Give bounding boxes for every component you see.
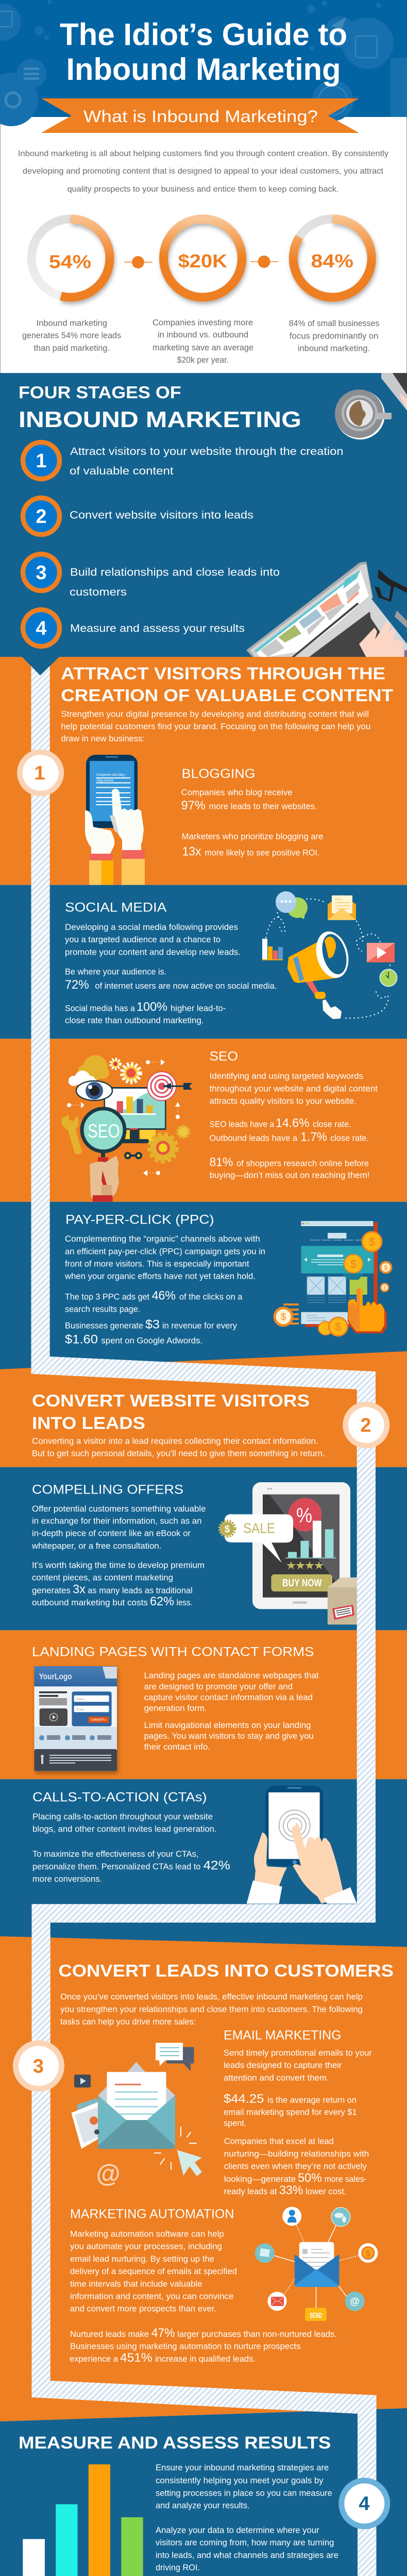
ppc text: an efficient pay-per-click (PPC) campaign gets you in	[65, 1246, 265, 1256]
stage 3	[23, 554, 280, 598]
stage 1: 1	[36, 450, 47, 472]
seo text: Identifying and using targeted keywords	[209, 1071, 363, 1081]
icon: automation network	[255, 2207, 378, 2321]
donut: 54%: 54%	[49, 251, 91, 272]
heading	[19, 383, 301, 432]
icon: ppc webpage and coins: $	[384, 1264, 388, 1272]
panel: landing pages	[0, 1630, 407, 1779]
caption: $20k: in inbound vs. outbound	[158, 330, 248, 340]
email marketing text: clients even when they’re not actively	[224, 2161, 367, 2171]
stage 2	[23, 498, 253, 535]
marketing automation text: 47%	[151, 2326, 175, 2340]
offers text: in exchange for their information, such as an	[32, 1516, 201, 1526]
heading: INTO LEADS	[32, 1413, 145, 1432]
notch arrow	[22, 657, 59, 675]
badge 4	[342, 2481, 387, 2527]
cta text: more conversions.	[32, 1874, 102, 1884]
offers text: It’s worth taking the time to develop premium	[32, 1560, 205, 1570]
ppc text: when your organic efforts have not yet taken hold.	[64, 1271, 256, 1281]
marketing automation text: and convert more prospects than ever.	[70, 2304, 216, 2314]
marketing automation text	[70, 2207, 337, 2365]
stage 1: of valuable content	[70, 465, 174, 477]
badge 1: 1	[34, 762, 45, 784]
seo text: close rate.	[313, 1120, 351, 1129]
badge 2: 2	[360, 1415, 371, 1436]
ppc text: The top 3 PPC ads get	[65, 1292, 149, 1301]
heading	[61, 664, 393, 705]
icon: landing page mockup: Email	[76, 1708, 84, 1711]
icon: sale tablet	[220, 1482, 357, 1624]
stage 4: Measure and assess your results	[70, 623, 245, 635]
cta text: To maximize the effectiveness of your CTAs,	[32, 1849, 198, 1859]
ribbon heading: What is Inbound Marketing?	[83, 107, 318, 126]
cta text	[32, 1790, 230, 1884]
donut: 54%	[31, 219, 110, 297]
offers text: in-depth piece of content like an eBook or	[32, 1529, 191, 1538]
social media text	[65, 900, 277, 1025]
social media text: promote your content and develop new leads.	[65, 947, 241, 957]
ppc text: PAY-PER-CLICK (PPC)	[65, 1213, 214, 1227]
icon: laptop	[246, 562, 407, 663]
social media text: Developing a social media following provides	[65, 922, 238, 932]
caption: 84%	[289, 319, 379, 353]
social media text: 100%	[137, 1000, 167, 1014]
caption: 54%	[22, 319, 121, 353]
heading: INBOUND MARKETING	[19, 407, 301, 432]
email marketing text: attention and convert them.	[224, 2073, 329, 2082]
icon: coffee cup	[335, 389, 392, 439]
intro text	[32, 1436, 325, 1459]
stage 1: Attract visitors to your website through the creation	[70, 446, 343, 457]
background icons	[0, 0, 407, 126]
title	[60, 17, 347, 87]
intro paragraph: developing and promoting content that is designed to appeal to your ideal customers, you attract	[23, 167, 384, 176]
icon: landing page mockup	[34, 1666, 117, 1771]
seo text	[209, 1049, 378, 1180]
seo text: Outbound leads have a	[209, 1133, 298, 1143]
email marketing text	[224, 2028, 372, 2197]
stage 1	[23, 442, 343, 479]
ppc text: Businesses generate	[65, 1320, 143, 1330]
landing text: pages. You want visitors to stay and give you	[144, 1731, 314, 1741]
landing text	[144, 1671, 319, 1752]
stage 3: Build relationships and close leads into	[70, 567, 280, 579]
icon: phone held in hands: blog receive	[97, 779, 113, 783]
striped path connector	[31, 657, 376, 2576]
panel: seo	[0, 1039, 407, 1202]
caption: $20k: $20k per year.	[177, 355, 229, 365]
icon: ppc webpage and coins: $	[281, 1312, 286, 1322]
landing text: generation form.	[144, 1703, 207, 1713]
landing text: capture visitor contact information via a lead	[144, 1692, 313, 1702]
intro text: But to get such personal details, you’ll need to give them something in return.	[32, 1449, 325, 1459]
blogging text: 13x	[182, 845, 201, 859]
social media text: close rate than outbound marketing.	[65, 1015, 204, 1025]
icon: sale tablet: BUY NOW	[282, 1578, 322, 1589]
email marketing text: Companies that excel at lead	[224, 2137, 334, 2146]
ppc text: $1.60	[65, 1332, 98, 1346]
caption: 84%: inbound marketing.	[298, 344, 370, 353]
intro text	[61, 709, 370, 743]
icon: phone held in hands: Companies who blog r	[96, 773, 126, 777]
offers text: whitepaper, or a free consultation.	[31, 1541, 161, 1551]
offers text: content pieces, as content marketing	[32, 1573, 173, 1583]
seo text: 14.6%	[276, 1116, 309, 1130]
icon: phone held in hands	[85, 755, 145, 885]
intro text: you strengthen your relationships and close them into customers. The following	[60, 2004, 363, 2014]
panel: what is inbound marketing	[0, 117, 407, 373]
ppc text: of the clicks on a	[179, 1292, 243, 1301]
marketing automation text: you automate your processes, including	[70, 2242, 222, 2251]
intro text: Once you’ve converted visitors into leads, effective inbound marketing can help	[60, 1992, 363, 2002]
badge 4: 4	[359, 2493, 370, 2515]
donut: $20K	[164, 219, 242, 297]
marketing automation text: email lead nurturing. By setting up the	[70, 2254, 214, 2264]
panel: compelling offers	[0, 1467, 407, 1630]
icon: landing page mockup: CONVERT ▸	[91, 1719, 107, 1722]
caption: 84%: focus predominantly on	[290, 332, 378, 341]
social media text: 72%	[65, 978, 89, 992]
measure text	[156, 2463, 338, 2576]
marketing automation text: Marketing automation software can help	[70, 2229, 224, 2239]
seo text: 1.7%	[300, 1130, 327, 1144]
marketing automation text: Businesses using marketing automation to nurture prospects	[70, 2341, 300, 2351]
offers text: 3x	[73, 1582, 86, 1596]
heading	[32, 1391, 310, 1432]
email marketing text: is the average return on	[267, 2095, 357, 2105]
email marketing text: leads designed to capture their	[224, 2060, 342, 2070]
blogging text: Marketers who prioritize blogging are	[182, 832, 324, 841]
icon: email illustration: @	[96, 2160, 120, 2188]
marketing automation text: 451%	[120, 2351, 152, 2365]
ppc text: front of more visitors. This is especially important	[65, 1259, 249, 1268]
icon: megaphone network	[262, 891, 397, 1019]
social media text: Be where your audience is.	[65, 967, 166, 977]
intro text	[60, 1992, 363, 2026]
icon: ppc webpage and coins: $	[383, 1285, 386, 1291]
caption: 84%: 84% of small businesses	[289, 319, 379, 328]
heading: CONVERT LEADS INTO CUSTOMERS	[58, 1961, 394, 1980]
panel: convert leads into customers	[0, 1936, 407, 2421]
offers text: COMPELLING OFFERS	[32, 1482, 183, 1497]
caption: $20k: marketing save an average	[152, 343, 253, 352]
social media text: Social media has a	[65, 1004, 135, 1013]
heading: MEASURE AND ASSESS RESULTS	[19, 2433, 331, 2452]
seo text: attracts quality visitors to your website.	[209, 1096, 357, 1106]
measure text: visitors are coming from, how many are turning	[156, 2538, 334, 2548]
intro paragraph: Inbound marketing is all about helping customers find you through content creation. By consistently	[18, 149, 388, 158]
title: The Idiot’s Guide to	[60, 17, 347, 52]
marketing automation text: time intervals that include valuable	[70, 2279, 202, 2289]
caption: 54%: generates 54% more leads	[22, 331, 121, 341]
offers text: Offer potential customers something valuable	[32, 1504, 206, 1514]
icon: sale tablet: SALE	[243, 1520, 275, 1536]
intro text: help potential customers find your brand. Focusing on the following can help you	[61, 722, 370, 732]
seo text: SEO leads have a	[209, 1120, 274, 1129]
measure text: consistently helping you meet your goals by	[156, 2476, 324, 2485]
landing text: their contact info.	[144, 1742, 210, 1752]
landing text: Limit navigational elements on your landing	[144, 1720, 311, 1730]
marketing automation text: larger purchases than non-nurtured leads.	[177, 2329, 337, 2339]
email marketing text: Send timely promotional emails to your	[224, 2048, 372, 2058]
caption: 54%: than paid marketing.	[34, 344, 110, 353]
stage 2: Convert website visitors into leads	[70, 510, 253, 521]
email marketing text: ready leads at	[224, 2187, 277, 2196]
icon: hands tapping phone	[247, 1786, 357, 1904]
stage 3: customers	[70, 586, 127, 598]
email marketing text: $44.25	[224, 2092, 264, 2106]
email marketing text: nurturing—building relationships with	[224, 2149, 369, 2159]
landing text: Landing pages are standalone webpages that	[144, 1671, 319, 1681]
email marketing text: spent.	[224, 2119, 247, 2128]
caption: $20k	[152, 318, 253, 365]
icon: landing page mockup: YourLogo	[39, 1671, 72, 1681]
intro text: tasks can help you drive more sales:	[60, 2016, 196, 2026]
seo text: close rate.	[330, 1133, 369, 1143]
stage 2: 2	[36, 506, 47, 528]
measure text: driving ROI.	[156, 2563, 200, 2572]
icon: keyboard corner	[381, 373, 407, 411]
panel: convert visitors	[0, 1351, 407, 1467]
intro text: draw in new business:	[61, 734, 145, 743]
seo text: 81%	[209, 1155, 233, 1169]
icon: seo illustration: SEO	[88, 1121, 120, 1142]
icon: landing page mockup: Name	[76, 1698, 85, 1701]
marketing automation text: MARKETING AUTOMATION	[70, 2207, 234, 2222]
stage 4	[23, 610, 245, 646]
icon: email illustration	[71, 2043, 202, 2188]
seo text: buying—don’t miss out on reaching them!	[209, 1171, 369, 1180]
landing text: are designed to promote your offer and	[144, 1682, 293, 1691]
icon: seo illustration	[62, 1055, 192, 1202]
panel: four stages	[0, 373, 407, 663]
measure text: setting processes in place so you can measure	[156, 2488, 332, 2498]
cta text: Placing calls-to-action throughout your website	[32, 1812, 213, 1822]
marketing automation text: increase in qualified leads.	[155, 2354, 256, 2364]
ppc text: $3	[145, 1317, 160, 1331]
donut: 84%: 84%	[311, 250, 353, 272]
blogging text: more leads to their websites.	[209, 802, 317, 811]
stage 4: 4	[36, 618, 47, 639]
marketing automation text: experience a	[70, 2354, 118, 2364]
offers text: outbound marketing but costs	[32, 1598, 148, 1607]
title: Inbound Marketing	[66, 52, 341, 87]
intro paragraph: quality prospects to your business and entice them to keep coming back.	[67, 185, 339, 194]
blogging text	[181, 767, 324, 859]
badge 2	[346, 1404, 387, 1446]
marketing automation text: Nurtured leads make	[70, 2329, 149, 2339]
icon: ppc webpage and coins: $	[335, 1320, 342, 1333]
connector dot	[124, 256, 152, 268]
seo text: of shoppers research online before	[236, 1158, 369, 1168]
cta text: 42%	[203, 1858, 230, 1872]
intro text: Converting a visitor into a lead requires collecting their contact information.	[32, 1436, 318, 1446]
icon: automation network: SEND	[310, 2311, 322, 2320]
badge 1	[20, 752, 61, 793]
ppc text: search results page.	[65, 1304, 140, 1314]
panel: attract visitors	[0, 657, 407, 885]
email marketing text: email marketing spend for every $1	[224, 2107, 357, 2117]
social media text: of internet users are now active on social media.	[95, 981, 277, 991]
ppc text: in revenue for every	[162, 1320, 237, 1330]
ppc text: 46%	[152, 1289, 176, 1302]
marketing automation text: delivery of a sequence of emails at specified	[70, 2266, 237, 2276]
badge 3: 3	[33, 2056, 44, 2077]
heading: CREATION OF VALUABLE CONTENT	[61, 686, 393, 705]
intro paragraph	[18, 149, 388, 194]
email marketing text: EMAIL MARKETING	[224, 2028, 341, 2042]
measure text: Analyze your data to determine where your	[156, 2526, 319, 2535]
stage 3: 3	[36, 562, 47, 584]
heading: CONVERT WEBSITE VISITORS	[32, 1391, 310, 1410]
email marketing text: 50%	[298, 2171, 322, 2185]
heading: FOUR STAGES OF	[19, 383, 181, 402]
blogging text: Companies who blog receive	[181, 787, 293, 797]
social media text: you a targeted audience and a chance to	[65, 935, 221, 944]
cta text: CALLS-TO-ACTION (CTAs)	[32, 1790, 207, 1805]
blogging text: more likely to see positive ROI.	[205, 848, 319, 858]
ppc text	[64, 1213, 265, 1346]
offers text	[31, 1482, 206, 1608]
panel: header	[0, 0, 407, 133]
icon: ppc webpage and coins: $	[369, 1235, 375, 1248]
donut: $20K: $20K	[178, 250, 227, 272]
badge 3	[15, 2043, 62, 2089]
caption: $20k: Companies investing more	[152, 318, 253, 328]
ppc text: spent on Google Adwords.	[101, 1335, 202, 1345]
measure text: into leads, and what channels and strategies are	[156, 2550, 338, 2560]
email marketing text: lower cost.	[306, 2187, 346, 2196]
offers text: generates	[32, 1585, 71, 1595]
panel: calls to action	[0, 1779, 407, 1947]
caption: 54%: Inbound marketing	[36, 319, 107, 328]
seo text: throughout your website and digital content	[209, 1083, 378, 1093]
social media text: SOCIAL MEDIA	[65, 900, 167, 914]
offers text: less.	[177, 1598, 193, 1607]
connector dot	[250, 256, 278, 268]
heading: ATTRACT VISITORS THROUGH THE	[61, 664, 385, 683]
panel: social media	[0, 885, 407, 1039]
panel: pay-per-click	[0, 1202, 407, 1372]
email marketing text: more sales-	[325, 2174, 367, 2184]
icon: sale tablet: %	[296, 1504, 312, 1527]
donut: 84%	[293, 219, 371, 297]
intro text: Strengthen your digital presence by developing and distributing content that will	[61, 709, 369, 719]
seo text: SEO	[209, 1049, 238, 1063]
heading: LANDING PAGES WITH CONTACT FORMS	[32, 1645, 314, 1659]
ppc text: Complementing the “organic” channels above with	[65, 1234, 260, 1244]
social media text: higher lead-to-	[171, 1004, 226, 1013]
panel: measure and assess	[0, 2408, 407, 2576]
cta text: blogs, and other content invites lead generation.	[32, 1824, 217, 1834]
marketing automation text: information and content, you can convince	[70, 2291, 233, 2301]
email marketing text: 33%	[279, 2183, 303, 2197]
measure text: Ensure your inbound marketing strategies are	[156, 2463, 329, 2472]
icon: automation network: $	[366, 2249, 370, 2258]
bar chart	[21, 2464, 145, 2576]
icon: ppc webpage and coins	[275, 1221, 392, 1336]
offers text: 62%	[150, 1595, 174, 1608]
cta text: personalize them. Personalized CTAs lead to	[32, 1861, 200, 1871]
measure text: and analyze your results.	[156, 2500, 250, 2510]
icon: sale tablet: $	[225, 1524, 230, 1535]
ribbon heading	[41, 98, 359, 133]
blogging text: BLOGGING	[182, 767, 256, 781]
offers text: as many leads as traditional	[88, 1585, 193, 1595]
icon: automation network: @	[350, 2296, 360, 2307]
blogging text: 97%	[181, 799, 206, 812]
email marketing text: looking—generate	[224, 2174, 296, 2184]
icon: ppc webpage and coins: $	[350, 1258, 357, 1270]
